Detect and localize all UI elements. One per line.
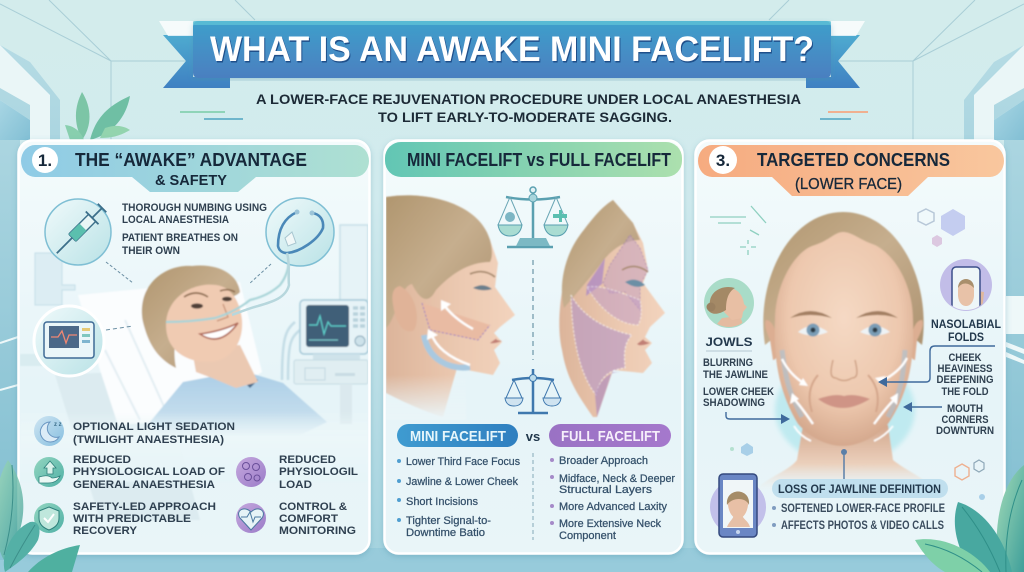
benefit: safety-led approach <box>34 501 216 537</box>
benefit: control and comfort monitoring: COMFORT <box>279 513 338 525</box>
benefit: control and comfort monitoring: MONITORING <box>279 525 356 537</box>
list: full facelift features: Midface, Neck & Deeper <box>559 473 675 485</box>
benefit: reduced physiologil load: LOAD <box>279 479 312 491</box>
lower dashed divider <box>532 453 534 540</box>
banner title: WHAT IS AN AWAKE MINI FACELIFT? <box>211 32 815 70</box>
header: comparison <box>385 142 682 177</box>
hair <box>142 266 240 368</box>
header: awake advantage <box>21 145 369 192</box>
benefit: optional light sedation <box>34 416 235 446</box>
benefit: reduced physiological load of general anaesthesia: REDUCED <box>73 454 131 466</box>
header: awake advantage: 1. <box>38 151 52 170</box>
banner title <box>159 21 865 88</box>
icon: stethoscope <box>232 198 334 315</box>
benefit: optional light sedation: (TWILIGHT ANAESTHESIA) <box>73 434 224 446</box>
plant: bottom-right foliage <box>915 465 1024 572</box>
face: front view <box>762 211 925 483</box>
patient monitor and cart <box>294 300 368 424</box>
callouts: numbing and breathing: PATIENT BREATHES ON <box>122 232 238 244</box>
jowls callout: LOWER CHEEK <box>703 386 774 398</box>
jowls callout: SHADOWING <box>703 397 765 409</box>
jawline definition callout: SOFTENED LOWER-FACE PROFILE <box>781 503 945 515</box>
list: mini facelift features: Downtime Batio <box>406 527 485 539</box>
subtitle: TO LIFT EARLY-TO-MODERATE SAGGING. <box>378 109 672 125</box>
callouts: numbing and breathing: THEIR OWN <box>122 245 180 257</box>
central dashed divider <box>532 260 534 360</box>
list: mini facelift features <box>397 456 520 539</box>
pill: full facelift <box>549 424 671 447</box>
pill: mini facelift <box>397 424 518 447</box>
nasolabial folds callout: FOLDS <box>948 330 984 344</box>
face: full facelift profile <box>559 200 665 417</box>
nasolabial folds callout: THE FOLD <box>942 386 989 398</box>
icon: syringe <box>45 199 133 283</box>
benefit: reduced physiologil load: REDUCED <box>279 454 336 466</box>
jawline definition callout: LOSS OF JAWLINE DEFINITION <box>778 482 941 496</box>
jowls callout: THE JAWLINE <box>703 369 768 381</box>
list: mini facelift features: Lower Third Face Focus <box>406 456 520 468</box>
callouts: numbing and breathing <box>122 202 267 257</box>
face: mini facelift profile <box>386 195 515 420</box>
benefit: reduced physiological load of general anaesthesia: PHYSIOLOGICAL LOAD OF <box>73 466 225 478</box>
jowls callout <box>703 278 790 424</box>
top-left plant <box>65 92 130 140</box>
decorative accent dashes <box>180 112 868 119</box>
icon: lower scales <box>505 369 561 413</box>
header: targeted concerns: TARGETED CONCERNS <box>757 150 950 170</box>
list: full facelift features <box>550 455 675 542</box>
list: full facelift features: Component <box>559 530 616 542</box>
nasolabial folds callout: CHEEK <box>948 352 982 364</box>
banner title: WHAT IS AN AWAKE MINI FACELIFT? <box>210 30 814 69</box>
plant: bottom-left foliage <box>0 460 80 572</box>
list: full facelift features: Structural Layers <box>559 484 653 496</box>
gown <box>150 374 326 431</box>
mouth corners callout <box>903 402 994 437</box>
nasolabial folds callout: NASOLABIAL <box>931 317 1001 331</box>
mouth corners callout: MOUTH <box>947 403 983 415</box>
list: mini facelift features: Tighter Signal-to- <box>406 515 491 527</box>
panel: targeted concerns <box>696 140 1004 554</box>
icon: phone with portrait <box>710 474 766 537</box>
header: targeted concerns: 3. <box>716 151 730 170</box>
benefit: control and comfort monitoring: CONTROL & <box>279 501 347 513</box>
vs label: vs <box>526 429 540 444</box>
nasolabial folds callout <box>878 259 1001 398</box>
icon: upper scales <box>498 187 568 247</box>
header: awake advantage: THE “AWAKE” ADVANTAGE <box>75 150 307 170</box>
benefit: safety-led approach: SAFETY-LED APPROACH <box>73 501 216 513</box>
list: full facelift features: More Extensive Neck <box>559 518 661 530</box>
nasolabial folds callout: DEEPENING <box>936 374 994 386</box>
icon: vital signs monitor <box>34 306 133 376</box>
benefit: safety-led approach: WITH PREDICTABLE <box>73 513 191 525</box>
benefit: control and comfort monitoring <box>236 501 356 537</box>
header: targeted concerns <box>698 145 1004 196</box>
jawline definition callout: AFFECTS PHOTOS & VIDEO CALLS <box>781 520 944 532</box>
face <box>166 285 242 362</box>
decorative hexagons and sparks <box>710 206 985 500</box>
pill: full facelift: FULL FACELIFT <box>561 428 660 445</box>
benefit: reduced physiologil load: PHYSIOLOGIL <box>279 466 358 478</box>
header: targeted concerns: (LOWER FACE) <box>795 176 902 193</box>
jawline definition callout <box>772 449 948 532</box>
nasolabial folds callout: HEAVINESS <box>938 363 992 375</box>
panel: mini facelift vs full facelift <box>384 140 682 554</box>
fade to text <box>72 418 326 481</box>
list: mini facelift features: Short Incisions <box>406 496 478 508</box>
benefit: reduced physiological load of general anaesthesia <box>34 454 225 491</box>
callouts: numbing and breathing: THOROUGH NUMBING USING <box>122 202 267 214</box>
list: full facelift features: More Advanced Laxity <box>559 501 667 513</box>
room and bed illustration <box>20 225 368 520</box>
benefit: optional light sedation: z z <box>54 422 62 428</box>
mouth corners callout: CORNERS <box>942 414 988 426</box>
pill: mini facelift: MINI FACELIFT <box>410 428 506 445</box>
panel: the awake advantage and safety <box>18 140 370 554</box>
benefit: reduced physiological load of general anaesthesia: GENERAL ANAESTHESIA <box>73 479 215 491</box>
jowls callout: JOWLS <box>706 335 752 349</box>
header: awake advantage: & SAFETY <box>155 172 227 189</box>
mouth corners callout: DOWNTURN <box>936 425 994 437</box>
jowls callout: BLURRING <box>703 357 753 369</box>
benefit: reduced physiologil load <box>236 454 358 491</box>
subtitle <box>256 91 801 125</box>
header: comparison: MINI FACELIFT vs FULL FACELIFT <box>407 150 671 170</box>
subtitle: A LOWER-FACE REJUVENATION PROCEDURE UNDER LOCAL ANAESTHESIA <box>256 91 801 107</box>
list: mini facelift features: Jawline & Lower Cheek <box>406 476 518 488</box>
benefit: safety-led approach: RECOVERY <box>73 525 138 537</box>
list: full facelift features: Broader Approach <box>559 455 648 467</box>
benefit: optional light sedation: OPTIONAL LIGHT SEDATION <box>73 421 235 433</box>
callouts: numbing and breathing: LOCAL ANAESTHESIA <box>122 214 229 226</box>
